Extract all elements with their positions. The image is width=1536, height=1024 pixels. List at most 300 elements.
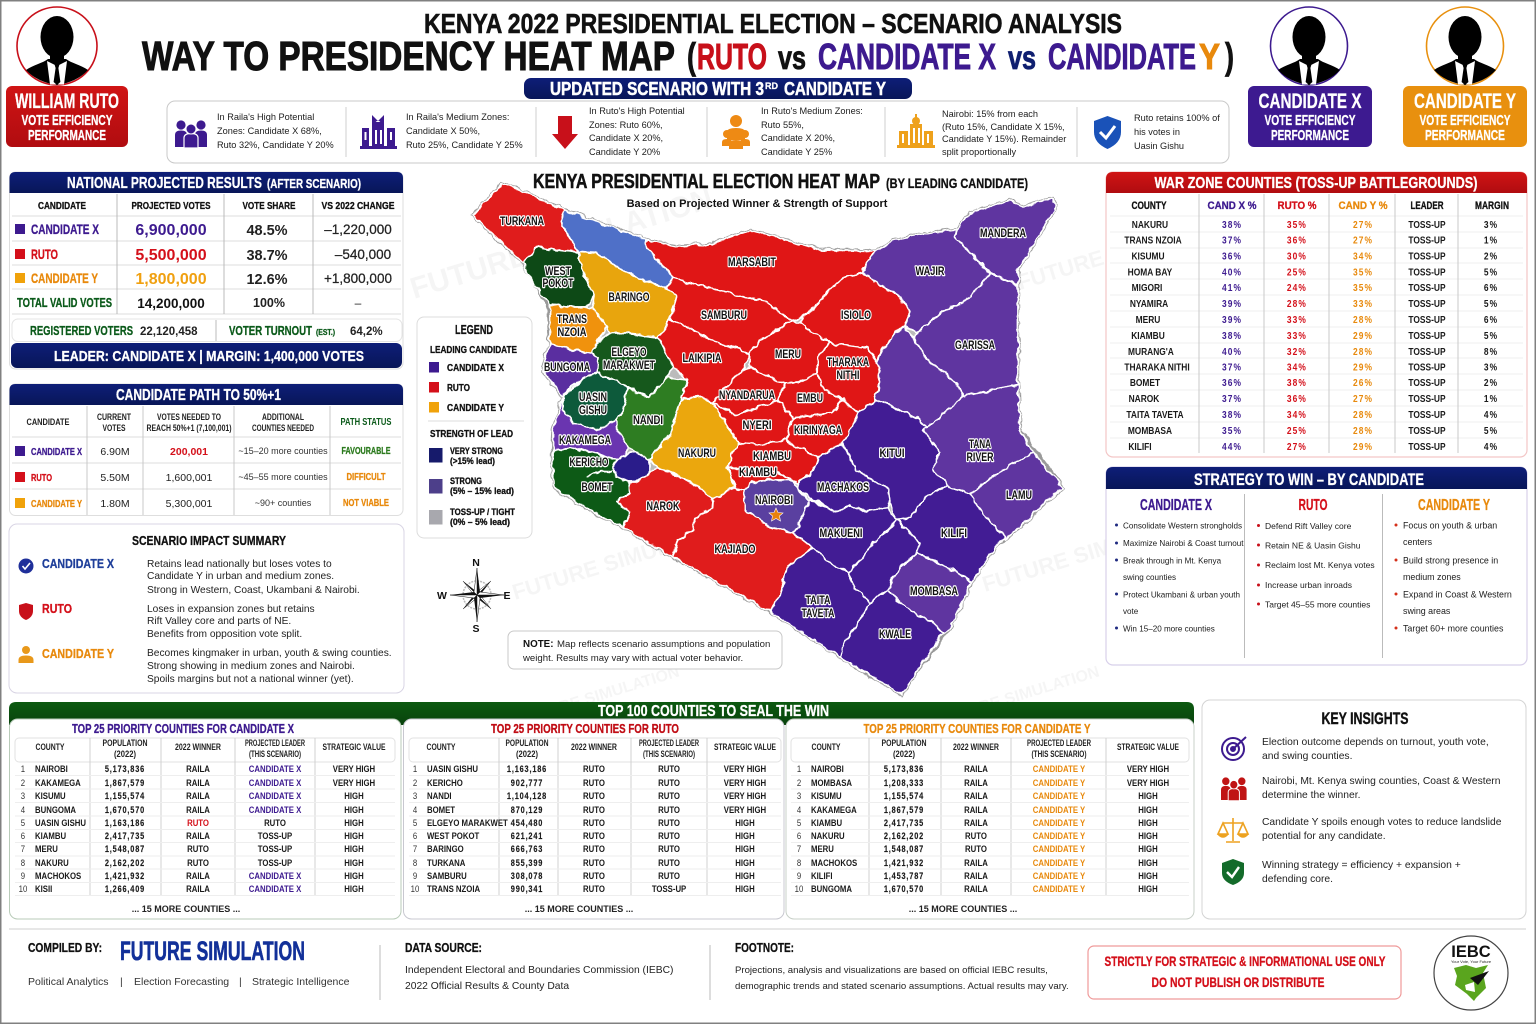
sub-panel: Candidate X priorities: RAILA — [186, 763, 211, 774]
table rows: 6% — [1484, 314, 1498, 325]
table header — [26, 412, 392, 433]
column: Candidate X: Win 15–20 more counties — [1123, 624, 1215, 634]
sub-panel: Ruto priorities: 666,763 — [511, 844, 543, 854]
insight: turnout: and swing counties. — [1262, 751, 1352, 762]
county: Narok — [617, 467, 713, 557]
table header: MARGIN — [1475, 200, 1509, 212]
county labels: NAROK — [646, 501, 680, 513]
name card: Candidate X: PERFORMANCE — [1271, 128, 1349, 144]
sub-panel: Candidate X priorities: 3 — [21, 790, 25, 801]
table rows: TOSS-UP — [1408, 235, 1446, 246]
sub-panel: Ruto priorities: VERY HIGH — [724, 790, 766, 801]
panel: top 100 counties — [9, 702, 1194, 919]
table rows — [1124, 219, 1498, 452]
county: Mandera — [955, 198, 1055, 285]
sub-panel: Ruto priorities: HIGH — [735, 883, 755, 894]
table rows: 28% — [1353, 346, 1373, 357]
compass: S — [472, 623, 480, 635]
row: Candidate Y path: ~90+ counties — [255, 498, 312, 508]
table rows: 25% — [1287, 267, 1307, 278]
sub-panel: Candidate X priorities: CANDIDATE X — [249, 777, 301, 788]
county: West Pokot — [523, 247, 595, 307]
sub-panel: Ruto priorities: RUTO — [583, 857, 605, 868]
legend item: very strong: (>15% lead) — [450, 456, 495, 466]
footer: compiled by: | — [120, 976, 123, 988]
table rows: 34% — [1287, 362, 1307, 373]
sub-panel: Ruto priorities: RUTO — [583, 870, 605, 881]
sub-panel: Candidate Y priorities: RAILA — [964, 763, 989, 774]
county labels: BOMET — [582, 482, 612, 494]
column: Ruto — [1257, 497, 1375, 610]
impact text: Candidate X: Candidate Y in urban and medium zones. — [147, 571, 334, 582]
sub-panel: Candidate Y priorities: 4 — [797, 804, 801, 815]
sub-panel: Ruto priorities: 4 — [413, 804, 417, 815]
sub-panel: Candidate X priorities: STRATEGIC VALUE — [322, 742, 386, 752]
table rows: 5% — [1484, 330, 1498, 341]
sub-panel: Candidate X priorities: HIGH — [344, 870, 364, 881]
table rows: 6% — [1484, 282, 1498, 293]
sub-panel: Ruto priorities: 8 — [413, 857, 417, 868]
insight: swing regions: determine the winner. — [1262, 790, 1360, 801]
table rows: 40% — [1222, 346, 1242, 357]
name card: Candidate X: VOTE EFFICIENCY — [1264, 113, 1356, 129]
table rows: KILIFI — [1128, 441, 1152, 452]
impact text: Candidate Y: Strong showing in medium zones and Nairobi. — [147, 661, 355, 672]
sub-panel: Candidate X priorities: VERY HIGH — [333, 763, 375, 774]
map title: KENYA PRESIDENTIAL ELECTION HEAT MAP — [533, 171, 880, 193]
legend item: very strong — [429, 446, 503, 466]
county: Laikipia — [658, 320, 750, 402]
legend item: very strong: VERY STRONG — [450, 446, 503, 456]
footer: compiled by: Strategic Intelligence — [252, 976, 350, 988]
sub-panel: Candidate Y priorities: HIGH — [1138, 790, 1158, 801]
sub-panel: Ruto priorities: KERICHO — [427, 777, 463, 788]
county: Lamu — [970, 453, 1063, 540]
assumption: Ruto high potential: In Ruto's High Potential — [589, 106, 685, 116]
sub-panel: Candidate Y priorities: 2 — [797, 777, 801, 788]
county labels: KWALE — [879, 629, 911, 641]
table rows: 5% — [1484, 298, 1498, 309]
sub-panel: Candidate Y priorities: 1,867,579 — [884, 805, 924, 815]
sub-panel: Candidate X priorities: TOSS-UP — [258, 857, 292, 868]
row: Ruto: 5,500,000 — [135, 247, 207, 264]
subtitle pill: CANDIDATE Y — [784, 79, 886, 99]
sub-panel: Candidate X priorities: TOP 25 PRIORITY COUNTIES FOR CANDIDATE X — [72, 722, 294, 736]
sub-panel: Candidate X priorities: 5,173,836 — [105, 764, 145, 774]
footer: footnote: Projections, analysis and visualizations are based on official IEBC results, — [735, 965, 1048, 976]
panel: war zone counties — [1106, 172, 1527, 457]
sub-panel: Ruto priorities: HIGH — [735, 870, 755, 881]
legend item: strong: (5% – 15% lead) — [450, 486, 514, 496]
row: Candidate X: –1,220,000 — [324, 222, 392, 237]
footer: compiled by — [28, 936, 350, 988]
sub-panel: Candidate X priorities — [10, 719, 401, 919]
insight: winning strategy: defending core. — [1262, 874, 1333, 885]
sub-panel: Candidate X priorities: 1,155,574 — [105, 791, 145, 801]
table rows: BOMET — [1130, 377, 1160, 388]
table rows: TOSS-UP — [1408, 377, 1446, 388]
sub-panel: Candidate Y priorities: HIGH — [1138, 843, 1158, 854]
icon: red shield — [19, 603, 33, 620]
table header: COUNTY — [1132, 200, 1167, 212]
table rows: 5% — [1484, 267, 1498, 278]
column: Candidate X: CANDIDATE X — [1140, 497, 1212, 514]
table rows: 33% — [1287, 314, 1307, 325]
row: Candidate Y path: 5,300,001 — [166, 498, 213, 510]
sub-panel: Candidate Y priorities: MACHOKOS — [811, 857, 857, 868]
sub-panel: Candidate Y priorities: NAKURU — [811, 830, 845, 841]
sub-panel: Ruto priorities: RUTO — [658, 830, 680, 841]
column: Candidate X: Maximize Nairobi & Coast turnout — [1123, 539, 1244, 548]
table rows: 33% — [1287, 330, 1307, 341]
county labels: MOMBASA — [910, 586, 958, 598]
sub-panel: Candidate X priorities: BUNGOMA — [35, 804, 77, 815]
heading — [1106, 467, 1527, 489]
sub-panel: Candidate Y priorities: CANDIDATE Y — [1033, 777, 1085, 788]
sub-panel: Candidate X priorities: MACHOKOS — [35, 870, 81, 881]
registered voters and turnout — [12, 319, 402, 342]
table rows: 2% — [1484, 377, 1498, 388]
county labels: MAKUENI — [820, 528, 862, 540]
sub-panel: Ruto priorities: VERY HIGH — [724, 804, 766, 815]
county labels: NYERI — [742, 420, 772, 432]
sub-panel: Candidate Y priorities: CANDIDATE Y — [1033, 804, 1085, 815]
sub-panel: Candidate X priorities: 1,266,409 — [105, 884, 145, 894]
assumption: Raila high potential: Ruto 32%, Candidate Y 20% — [217, 140, 334, 150]
table rows: TOSS-UP — [1408, 425, 1446, 436]
sub-panel: Ruto priorities: 454,480 — [511, 818, 543, 828]
county labels: POKOT — [542, 278, 574, 290]
sub-panel: Candidate Y priorities: 3 — [797, 790, 801, 801]
table rows: KISUMU — [1131, 251, 1165, 262]
table rows: 37% — [1222, 235, 1242, 246]
assumption: Raila high potential: Zones: Candidate X 68%, — [217, 126, 322, 136]
subtitle pill: UPDATED SCENARIO WITH 3 — [550, 79, 764, 99]
table header: REACH 50%+1 (7,100,001) — [146, 423, 232, 433]
county: south unnamed — [848, 520, 920, 602]
sub-panel: Candidate X priorities: HIGH — [344, 883, 364, 894]
assumption: Ruto medium: In Ruto's Medium Zones: — [761, 106, 863, 116]
sub-panel: Candidate Y priorities: CANDIDATE Y — [1033, 843, 1085, 854]
sub-panel: Candidate X priorities: 6 — [21, 830, 25, 841]
sub-panel: Candidate X priorities: 1 — [21, 763, 25, 774]
table rows: 28% — [1353, 409, 1373, 420]
heading — [10, 172, 403, 193]
footer: footnote — [735, 940, 1069, 992]
table header: VS 2022 CHANGE — [322, 200, 394, 212]
sub-panel: Candidate Y priorities: 1,453,787 — [884, 871, 924, 881]
watermarks: FUTURE SIMULATION — [509, 513, 737, 605]
table rows: 27% — [1353, 219, 1373, 230]
county: Kericho and Bomet — [552, 448, 630, 527]
table rows: TOSS-UP — [1408, 267, 1446, 278]
row: total valid votes: – — [355, 296, 362, 310]
row: total valid votes: 14,200,000 — [137, 296, 205, 311]
footer: compiled by: COMPILED BY: — [28, 940, 102, 955]
sub-panel: Ruto priorities: RUTO — [658, 777, 680, 788]
sub-panel: Candidate Y priorities: HIGH — [1138, 830, 1158, 841]
sub-panel: Candidate Y priorities: PROJECTED LEADER — [1027, 738, 1091, 748]
sub-panel: Ruto priorities: 7 — [413, 843, 417, 854]
table header: VOTES NEEDED TO — [157, 412, 221, 422]
sub-panel: Candidate X priorities: KISUMU — [35, 790, 66, 801]
county: Nakuru — [650, 397, 738, 498]
heading: KEY INSIGHTS — [1322, 709, 1408, 728]
sub-panel: Candidate Y priorities: KISUMU — [811, 790, 842, 801]
county: Meru — [750, 320, 830, 383]
table rows: 27% — [1353, 235, 1373, 246]
sub-panel: Candidate X priorities: TOSS-UP — [258, 843, 292, 854]
sub-panel: Candidate Y priorities: 1,421,932 — [884, 858, 924, 868]
heading: SCENARIO IMPACT SUMMARY — [132, 533, 286, 548]
table rows: 38% — [1222, 219, 1242, 230]
sub-panel: Candidate X priorities: HIGH — [344, 817, 364, 828]
sub-panel: Candidate Y priorities: 10 — [795, 883, 803, 894]
table header: VOTE SHARE — [242, 200, 296, 212]
sub-panel: Ruto priorities: STRATEGIC VALUE — [714, 742, 776, 752]
leader and margin banner: LEADER: CANDIDATE X | MARGIN: 1,400,000 VOTES — [54, 348, 364, 365]
sub-panel: Candidate Y priorities: HIGH — [1138, 857, 1158, 868]
column: Ruto: Retain NE & Uasin Gishu — [1265, 540, 1361, 550]
county: Makueni — [793, 500, 897, 573]
label: Candidate Y: CANDIDATE Y — [42, 646, 114, 661]
outline — [473, 183, 1063, 695]
sub-panel: Ruto priorities: HIGH — [735, 830, 755, 841]
registered voters and turnout: 64,2% — [350, 326, 383, 338]
sub-panel: Candidate Y priorities: 5,173,836 — [884, 764, 924, 774]
sub-panel: Candidate X priorities: 8 — [21, 857, 25, 868]
sub-panel: Candidate Y priorities: TOP 25 PRIORITY COUNTIES FOR CANDIDATE Y — [864, 722, 1091, 736]
sub-panel: Candidate Y priorities: (THIS SCENARIO) — [1032, 749, 1087, 759]
table rows: HOMA BAY — [1128, 267, 1172, 278]
sub-panel: Ruto priorities: RUTO — [658, 857, 680, 868]
table rows: 3% — [1484, 362, 1498, 373]
title line 2: ( — [687, 36, 696, 77]
row: Candidate X path: CANDIDATE X — [31, 446, 82, 458]
sub-panel: Ruto priorities: ELGEYO MARAKWET — [427, 817, 508, 828]
table rows: 25% — [1287, 425, 1307, 436]
sub-panel: Ruto priorities — [404, 719, 784, 919]
county: Uasin Gishu — [563, 373, 627, 430]
column: Candidate X: Protect Ukambani & urban youth — [1123, 590, 1240, 600]
sub-panel: Ruto priorities: RUTO — [583, 817, 605, 828]
portrait: Candidate Y — [1426, 7, 1504, 85]
sub-panel: Candidate X priorities: CANDIDATE X — [249, 883, 301, 894]
county labels: KILIFI — [941, 528, 967, 540]
row: Candidate X — [15, 221, 392, 239]
table rows: 38% — [1287, 377, 1307, 388]
county labels: MANDERA — [980, 228, 1026, 240]
county: Elgeyo Marakwet — [592, 333, 673, 397]
table rows: 1% — [1484, 393, 1498, 404]
map: Kenya counties by leading candidate — [473, 183, 1063, 695]
legend item: Candidate X: CANDIDATE X — [447, 362, 504, 374]
table header: VOTES — [102, 423, 126, 433]
restricted use warning: DO NOT PUBLISH OR DISTRIBUTE — [1152, 974, 1324, 990]
title line 2: WAY TO PRESIDENCY HEAT MAP — [142, 33, 675, 79]
sub-panel: Candidate X priorities: 2,417,735 — [105, 831, 145, 841]
county: Nyandarua — [713, 367, 785, 415]
table rows: KIAMBU — [1131, 330, 1165, 341]
county: Mombasa — [887, 553, 972, 633]
column: Candidate X: Consolidate Western strongholds — [1123, 522, 1242, 530]
column: Ruto: RUTO — [1298, 497, 1328, 514]
county labels: NYANDARUA — [719, 390, 775, 402]
county labels: MARSABIT — [728, 257, 776, 269]
county labels: TANA — [969, 439, 991, 451]
table rows: 3% — [1484, 219, 1498, 230]
table header: CANDIDATE — [38, 200, 86, 212]
sub-panel: Candidate Y priorities: RAILA — [964, 777, 989, 788]
sub-panel: Candidate Y priorities: KILIFI — [811, 870, 833, 881]
sub-panel: Candidate X priorities: RAILA — [186, 804, 211, 815]
footer: footnote: FOOTNOTE: — [735, 940, 794, 955]
table rows: TAITA TAVETA — [1126, 409, 1184, 420]
assumption: Raila medium: In Raila's Medium Zones: — [406, 112, 509, 122]
name card: William Ruto: PERFORMANCE — [28, 128, 106, 144]
sub-panel: Ruto priorities: WEST POKOT — [427, 830, 480, 841]
sub-panel: Candidate Y priorities: CANDIDATE Y — [1033, 830, 1085, 841]
sub-panel: Ruto priorities: 3 — [413, 790, 417, 801]
county labels: GISHU — [579, 405, 607, 417]
sub-panel: Candidate X priorities: HIGH — [344, 790, 364, 801]
footer: data source: DATA SOURCE: — [405, 940, 482, 955]
table rows: NYAMIRA — [1130, 298, 1169, 309]
assumption: Uasin Gishu: his votes in — [1134, 127, 1180, 137]
sub-panel: Candidate X priorities: CANDIDATE X — [249, 763, 301, 774]
name card: Candidate X — [1248, 86, 1372, 147]
table rows: 38% — [1222, 330, 1242, 341]
column: Candidate Y — [1394, 497, 1512, 634]
panel: national projected results — [10, 172, 403, 369]
footer: compiled by: Election Forecasting — [134, 976, 229, 988]
county: Garissa — [913, 273, 1018, 397]
sub-panel: Ruto priorities: (THIS SCENARIO) — [643, 749, 695, 759]
impact text: Ruto: Benefits from opposition vote split. — [147, 629, 302, 640]
impact text: Candidate X: Retains lead nationally but loses votes to — [147, 559, 332, 570]
heading: (AFTER SCENARIO) — [267, 177, 361, 191]
footer: data source: 2022 Official Results & County Data — [405, 981, 569, 992]
icon: orange city hall — [897, 114, 935, 148]
row: Candidate X path — [15, 446, 391, 458]
column: Candidate X — [1115, 497, 1244, 634]
sub-panel: Ruto priorities: TRANS NZOIA — [427, 883, 481, 894]
sub-panel: Candidate X priorities: NAKURU — [35, 857, 69, 868]
sub-panel: Candidate X priorities: RUTO — [187, 817, 209, 828]
county labels: TAVETA — [802, 608, 834, 620]
county labels: LAIKIPIA — [682, 353, 722, 365]
county labels: THARAKA — [827, 357, 869, 369]
table rows: MERU — [1136, 314, 1161, 325]
table header: PATH STATUS — [340, 417, 392, 428]
column: Ruto: Defend Rift Valley core — [1265, 521, 1352, 531]
county: Baringo — [578, 252, 677, 337]
table rows: MURANG'A — [1128, 346, 1174, 357]
watermarks: FUTURE SIMULATION — [936, 664, 1102, 729]
sub-panel: Ruto priorities: 1,163,186 — [507, 764, 547, 774]
table rows: TOSS-UP — [1408, 330, 1446, 341]
sub-panel: Candidate Y priorities: 1,155,574 — [884, 791, 924, 801]
sub-panel: Candidate Y priorities: MERU — [811, 843, 834, 854]
row: Ruto: 38.7% — [246, 248, 288, 264]
name card: Candidate X: CANDIDATE X — [1258, 90, 1362, 113]
row: total valid votes: TOTAL VALID VOTES — [17, 295, 112, 310]
sub-panel: Candidate X priorities: 9 — [21, 870, 25, 881]
sub-panel: Candidate Y priorities: RAILA — [964, 804, 989, 815]
assumption: Uasin Gishu: Ruto retains 100% of — [1134, 113, 1220, 123]
county: Kitui — [842, 400, 947, 520]
watermarks: FUTURE SIMULATION — [1014, 203, 1242, 295]
county labels: MARAKWET — [603, 360, 655, 372]
title line 2: ) — [1225, 36, 1234, 77]
sub-panel: Candidate X priorities: 2022 WINNER — [175, 742, 221, 752]
sub-panel: Ruto priorities: 855,399 — [511, 858, 543, 868]
county labels: ELGEYO — [612, 347, 647, 359]
title line 2: vs — [778, 39, 806, 76]
sub-panel: Ruto priorities: HIGH — [735, 817, 755, 828]
table rows: MOMBASA — [1128, 425, 1172, 436]
table rows: NAKURU — [1132, 219, 1168, 230]
assumption: Ruto high potential: Candidate X 20%, — [589, 133, 663, 143]
sub-panel: Ruto priorities: COUNTY — [426, 742, 456, 752]
sub-panel: Candidate X priorities: 10 — [19, 883, 27, 894]
map title: (BY LEADING CANDIDATE) — [886, 176, 1028, 191]
sub-panel: Candidate X priorities: 2,162,202 — [105, 858, 145, 868]
sub-panel: Ruto priorities: VERY HIGH — [724, 777, 766, 788]
sub-panel: Ruto priorities: HIGH — [735, 843, 755, 854]
sub-panel: Ruto priorities: SAMBURU — [427, 870, 467, 881]
sub-panel: Candidate Y priorities: 8 — [797, 857, 801, 868]
sub-panel: Candidate Y priorities: BUNGOMA — [811, 883, 853, 894]
legend item: toss-up: TOSS-UP / TIGHT — [450, 507, 515, 517]
sub-panel: Candidate Y priorities: 2022 WINNER — [953, 742, 999, 752]
name card: William Ruto: VOTE EFFICIENCY — [22, 113, 113, 129]
sub-panel: Candidate Y priorities: CANDIDATE Y — [1033, 857, 1085, 868]
title line 2: CANDIDATE X — [818, 36, 996, 77]
table header: RUTO % — [1278, 200, 1317, 212]
sub-panel: Ruto priorities: RUTO — [583, 883, 605, 894]
heading — [10, 384, 403, 405]
sub-panel: Candidate X priorities: 1,670,570 — [105, 805, 145, 815]
county: Samburu — [667, 277, 792, 353]
sub-panel: Candidate Y priorities — [786, 719, 1194, 919]
registered voters and turnout: 22,120,458 — [140, 326, 198, 338]
sub-panel: Candidate Y priorities: 9 — [797, 870, 801, 881]
sub-panel: Ruto priorities: RUTO — [583, 790, 605, 801]
panel: candidate path to 50%+1 — [10, 384, 403, 516]
watermarks: FUTURE SIMULATION — [979, 505, 1207, 597]
table rows: THARAKA NITHI — [1124, 362, 1190, 373]
compass: E — [503, 590, 511, 602]
title line 1: KENYA 2022 PRESIDENTIAL ELECTION – SCENARIO ANALYSIS — [424, 8, 1122, 39]
note box: NOTE: — [523, 639, 553, 650]
assumption: Nairobi: split proportionally — [942, 147, 1016, 157]
icon: purple building — [360, 115, 397, 149]
sub-panel: Candidate X priorities: (2022) — [114, 749, 136, 759]
row: Ruto path: RUTO — [31, 472, 52, 484]
table rows: 37% — [1222, 362, 1242, 373]
table rows: 39% — [1222, 298, 1242, 309]
assumption: Nairobi: (Ruto 15%, Candidate X 15%, — [942, 122, 1065, 132]
sub-panel: Candidate X priorities: CANDIDATE X — [249, 790, 301, 801]
county labels — [500, 216, 1032, 641]
sub-panel: Ruto priorities: 10 — [411, 883, 419, 894]
table rows: 35% — [1287, 219, 1307, 230]
icon: purple people — [175, 120, 207, 148]
sub-panel: Ruto priorities: RUTO — [583, 804, 605, 815]
table rows: 40% — [1222, 267, 1242, 278]
sub-panel: Candidate X priorities: 7 — [21, 843, 25, 854]
